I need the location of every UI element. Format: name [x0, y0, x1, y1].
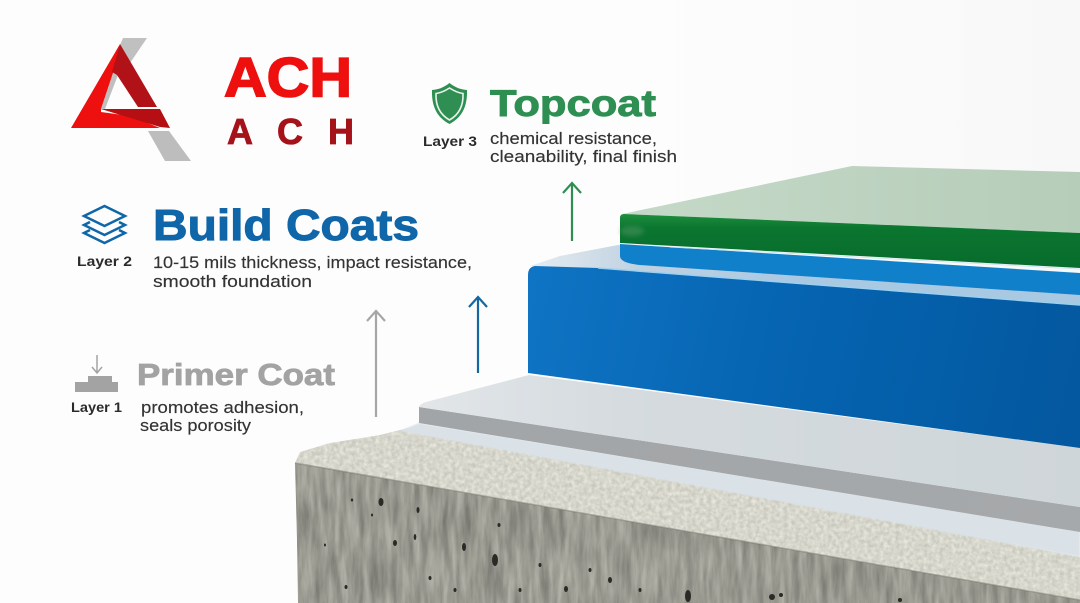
topcoat layer	[620, 166, 1080, 269]
arrow: build coats	[469, 297, 487, 373]
arrow: topcoat	[563, 183, 581, 241]
block: build coats	[77, 201, 472, 291]
label: layer 3: Layer 3	[423, 133, 477, 149]
block: primer coat	[71, 355, 335, 435]
build coats layer	[528, 244, 1080, 448]
icon: primer	[75, 355, 118, 392]
icon: shield	[432, 83, 467, 124]
logo mark	[71, 38, 191, 161]
description: primer coat: promotes adhesion,	[141, 398, 304, 417]
description: primer coat: seals porosity	[140, 416, 252, 435]
layered coating illustration	[290, 166, 1080, 603]
logo: ACH	[71, 38, 354, 161]
logo wordmark: ACH	[224, 46, 352, 108]
description: topcoat: chemical resistance,	[490, 129, 657, 148]
description: build coats: smooth foundation	[153, 272, 312, 291]
description: topcoat: cleanability, final finish	[490, 147, 677, 166]
concrete slab	[290, 420, 1080, 603]
logo subtitle: C	[277, 111, 303, 152]
arrow: primer coat	[367, 311, 385, 417]
label: layer 2: Layer 2	[77, 253, 132, 269]
logo subtitle: A	[227, 111, 253, 152]
logo subtitle: H	[328, 111, 354, 152]
primer coat layer	[400, 375, 1080, 557]
block: topcoat	[423, 83, 677, 166]
label: layer 1: Layer 1	[71, 399, 122, 415]
icon: layers	[84, 206, 125, 243]
heading: topcoat: Topcoat	[490, 83, 656, 124]
description: build coats: 10-15 mils thickness, impact resistance,	[153, 253, 472, 272]
heading: primer coat: Primer Coat	[137, 357, 335, 392]
heading: build coats: Build Coats	[153, 201, 419, 250]
